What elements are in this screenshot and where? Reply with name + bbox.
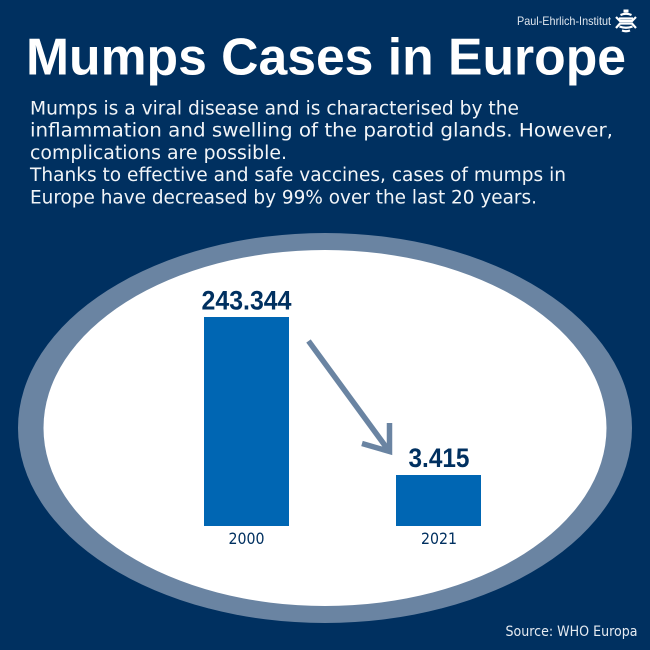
ellipse ring <box>18 233 632 623</box>
logo: Paul-Ehrlich-Institut <box>517 11 636 31</box>
bar: 2021: 3.415 <box>408 443 470 473</box>
intro text block <box>29 98 613 208</box>
logo icon <box>616 11 636 31</box>
intro text block: Europe have decreased by 99% over the last 20 years. <box>30 188 537 208</box>
intro text block: Thanks to effective and safe vaccines, cases of mumps in <box>29 165 566 186</box>
bar: 2021 <box>396 443 481 548</box>
source: Source: WHO Europa <box>506 624 638 640</box>
bar: 2000: 243.344 <box>202 286 292 316</box>
bar: 2000: 2000 <box>228 529 264 548</box>
intro text block: complications are possible. <box>30 143 287 164</box>
arrow: decrease <box>308 341 390 452</box>
bar: 2000 <box>202 286 292 548</box>
title: Mumps Cases in Europe <box>26 28 626 86</box>
chart panel: ellipse <box>18 233 632 623</box>
logo text: Paul-Ehrlich-Institut <box>517 14 612 28</box>
bar: 2021: 2021 <box>421 529 457 548</box>
ellipse interior <box>44 250 606 606</box>
intro text block: inflammation and swelling of the parotid glands. However, <box>30 120 613 142</box>
intro text block: Mumps is a viral disease and is characterised by the <box>30 98 519 120</box>
bar chart <box>202 286 481 548</box>
